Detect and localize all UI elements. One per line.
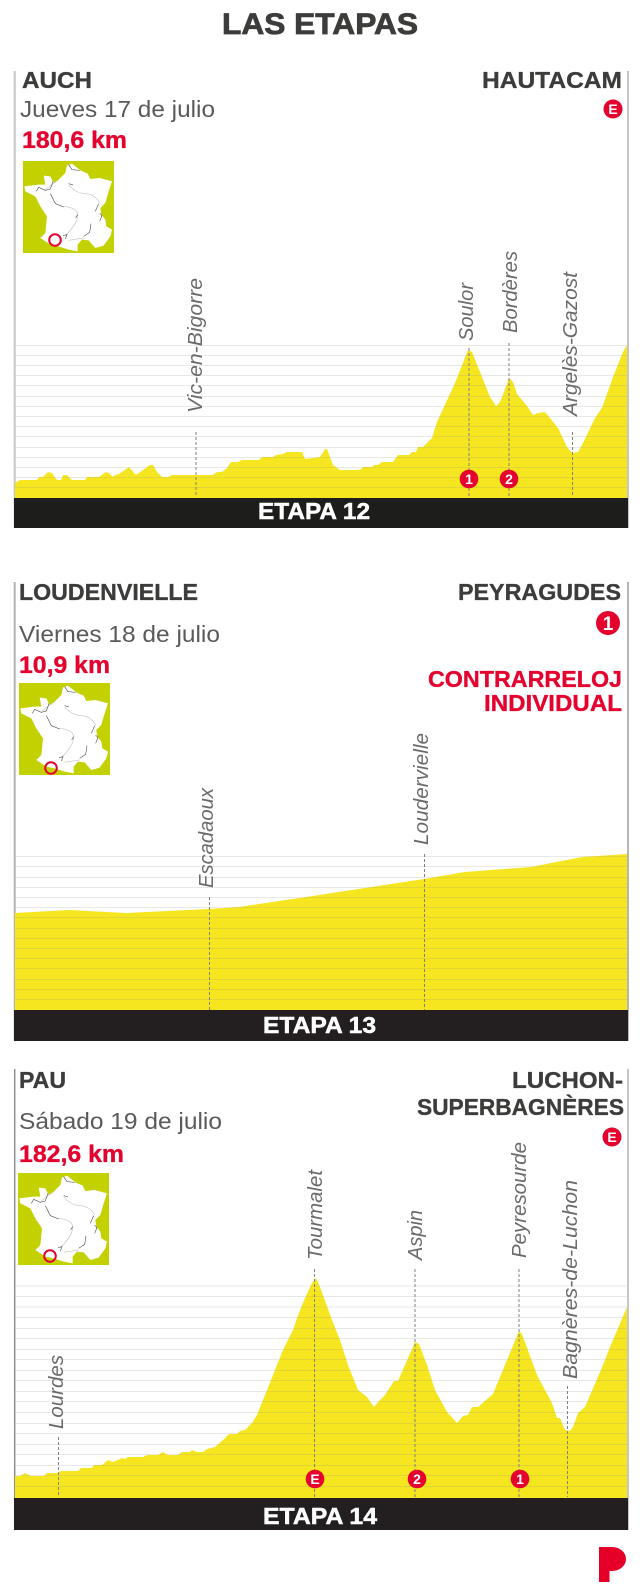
finish town: SUPERBAGNÈRES bbox=[417, 1093, 624, 1120]
map of France bbox=[23, 161, 114, 253]
place label: Vic-en-Bigorre: Vic-en-Bigorre bbox=[185, 278, 207, 413]
panel frame bbox=[15, 71, 628, 528]
place label: Loudervielle: Loudervielle bbox=[411, 733, 433, 845]
place label: Aspin: Aspin bbox=[405, 1210, 427, 1261]
stage bar: ETAPA 12 bbox=[258, 498, 370, 524]
map of France bbox=[18, 1173, 109, 1265]
place label: Bagnères-de-Luchon: Bagnères-de-Luchon bbox=[560, 1180, 582, 1379]
climb badge 2 bbox=[500, 470, 518, 488]
start town: LOUDENVIELLE bbox=[19, 579, 198, 605]
panel: etapa 13 bbox=[14, 579, 628, 1041]
finish town: HAUTACAM bbox=[482, 67, 622, 93]
finish category badge: E bbox=[607, 1129, 617, 1145]
stage bar bbox=[14, 498, 628, 528]
climb badge 1 bbox=[460, 470, 478, 488]
finish category badge bbox=[596, 611, 620, 635]
time trial note: CONTRARRELOJ bbox=[428, 666, 622, 692]
panel: etapa 12 bbox=[14, 67, 628, 528]
date: Jueves 17 de julio bbox=[20, 96, 215, 122]
time trial note bbox=[428, 666, 622, 716]
place label: Bordères: Bordères bbox=[500, 251, 522, 333]
panel frame bbox=[14, 1069, 16, 1530]
start town: PAU bbox=[19, 1067, 66, 1093]
icon: publisher logo bbox=[599, 1547, 626, 1582]
date: Sábado 19 de julio bbox=[19, 1108, 222, 1134]
distance: 182,6 km bbox=[19, 1141, 124, 1168]
climb badge 1: 1 bbox=[516, 1471, 524, 1487]
finish town: PEYRAGUDES bbox=[458, 579, 621, 605]
finish category badge: 1 bbox=[603, 614, 614, 635]
climb badge 1: 1 bbox=[465, 471, 473, 487]
finish category badge: E bbox=[608, 101, 618, 117]
place label: Escadaoux: Escadaoux bbox=[196, 787, 218, 888]
climb badge 2 bbox=[408, 1470, 426, 1488]
place label: Argelès-Gazost: Argelès-Gazost bbox=[560, 271, 582, 417]
distance: 180,6 km bbox=[22, 127, 127, 154]
finish category badge bbox=[602, 1128, 622, 1146]
climb badge E: E bbox=[310, 1471, 320, 1487]
place label: Tourmalet: Tourmalet bbox=[305, 1169, 327, 1260]
climb badge 1 bbox=[511, 1470, 529, 1488]
climb badge 2: 2 bbox=[413, 1471, 421, 1487]
climb badge 2: 2 bbox=[505, 471, 513, 487]
stage bar: ETAPA 13 bbox=[263, 1012, 376, 1038]
title: LAS ETAPAS bbox=[222, 8, 418, 41]
panel frame bbox=[15, 582, 628, 1041]
stage bar bbox=[14, 1010, 628, 1041]
elevation profile bbox=[15, 854, 627, 1010]
finish category badge bbox=[604, 100, 622, 118]
stage bar: ETAPA 14 bbox=[263, 1503, 377, 1529]
place label: Soulor: Soulor bbox=[456, 282, 478, 341]
time trial note: INDIVIDUAL bbox=[484, 690, 622, 716]
start town: AUCH bbox=[22, 67, 92, 93]
place label: Peyresourde: Peyresourde bbox=[509, 1142, 531, 1258]
stage bar bbox=[14, 1498, 628, 1530]
elevation profile bbox=[15, 345, 627, 498]
finish town: LUCHON- bbox=[512, 1067, 623, 1093]
elevation profile bbox=[15, 1278, 627, 1498]
distance: 10,9 km bbox=[19, 652, 110, 679]
climb badge E bbox=[306, 1470, 324, 1488]
panel: etapa 14 bbox=[14, 1067, 628, 1530]
date: Viernes 18 de julio bbox=[19, 621, 220, 647]
map of France bbox=[19, 683, 110, 775]
place label: Lourdes: Lourdes bbox=[46, 1355, 68, 1429]
finish town bbox=[417, 1067, 624, 1120]
